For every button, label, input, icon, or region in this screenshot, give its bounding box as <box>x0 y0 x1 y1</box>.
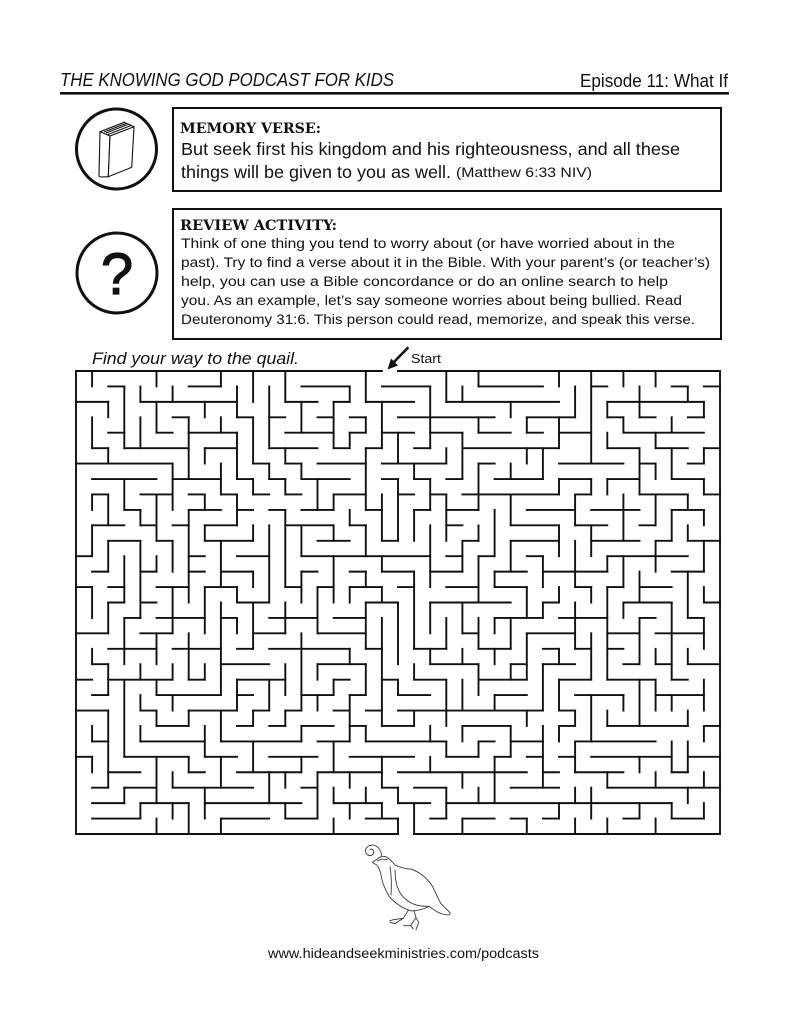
icon: question mark in circle <box>77 233 157 313</box>
footer url: www.hideandseekministries.com/podcasts <box>267 946 539 961</box>
memory verse text: But seek first his kingdom and his righteousness, and all these <box>181 139 680 159</box>
memory verse text: things will be given to you as well. <box>181 162 451 182</box>
icon: question mark in circle: ? <box>101 242 133 307</box>
icon: book in circle <box>76 109 156 189</box>
review activity text: you. As an example, let’s say someone worries about being bullied. Read <box>181 293 682 308</box>
review activity text: help, you can use a Bible concordance or do an online search to help <box>181 274 668 289</box>
review activity heading: REVIEW ACTIVITY: <box>180 218 337 234</box>
maze instruction: Find your way to the quail. <box>92 349 299 368</box>
review activity text: Deuteronomy 31:6. This person could read, memorize, and speak this verse. <box>181 312 695 327</box>
maze <box>76 371 720 834</box>
memory verse heading: MEMORY VERSE: <box>180 121 321 137</box>
panel: review activity <box>173 209 721 339</box>
memory verse text: (Matthew 6:33 NIV) <box>456 164 592 180</box>
review activity text <box>181 236 710 327</box>
memory verse text <box>181 139 680 182</box>
start label: Start <box>411 351 441 366</box>
header: podcast title: THE KNOWING GOD PODCAST FOR KIDS <box>60 70 394 90</box>
icon: quail <box>365 845 450 930</box>
review activity text: past). Try to find a verse about it in the Bible. With your parent’s (or teacher’s) <box>181 255 710 270</box>
review activity text: Think of one thing you tend to worry about (or have worried about in the <box>181 236 675 251</box>
arrow: start <box>388 347 408 370</box>
header: episode label: Episode 11: What If <box>580 71 729 91</box>
panel: memory verse <box>173 108 721 191</box>
